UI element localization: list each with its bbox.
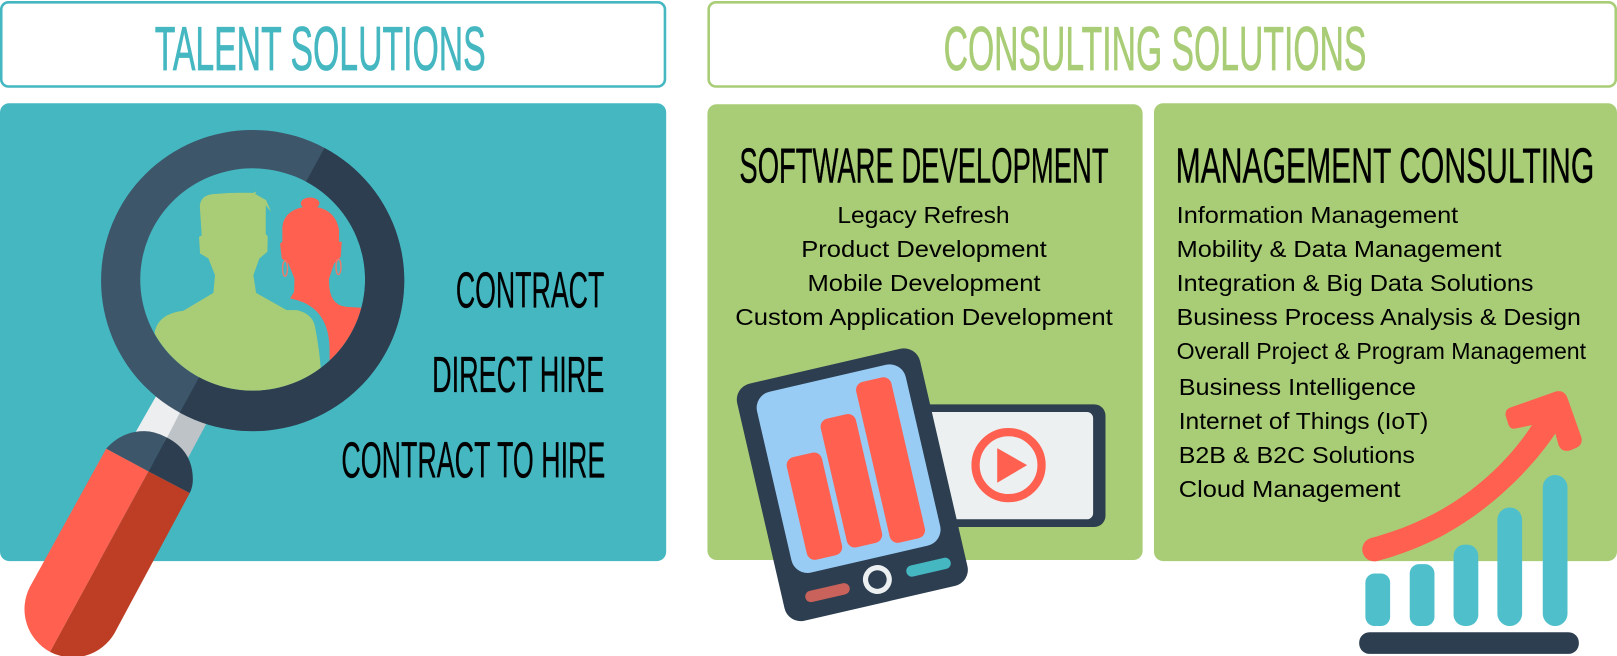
heading box: consulting solutions — [709, 2, 1616, 86]
list: management consulting services: Information Management — [1177, 202, 1459, 228]
people silhouettes — [154, 192, 362, 391]
icon: video screen — [877, 404, 1106, 527]
list: management consulting services: B2B & B2C Solutions — [1179, 442, 1415, 468]
icon: tablet with bar chart — [734, 345, 971, 624]
panel: talent solutions — [0, 103, 666, 561]
panel: software development — [707, 104, 1143, 560]
text: employment types: CONTRACT — [456, 261, 604, 318]
text: employment types: CONTRACT TO HIRE — [341, 432, 605, 489]
list: software development services: Product Development — [801, 236, 1047, 262]
icon: magnifying glass with people — [24, 130, 404, 656]
chart base — [1359, 632, 1579, 654]
list: management consulting services: Business Process Analysis & Design — [1177, 304, 1581, 330]
list: software development services: Custom Application Development — [735, 304, 1113, 330]
heading box: talent solutions — [1, 2, 665, 86]
list: management consulting services: Business Intelligence — [1179, 374, 1416, 400]
text: employment types — [341, 261, 605, 489]
woman silhouette — [280, 198, 362, 360]
icon: growth bar chart with arrow — [1359, 391, 1582, 654]
text: employment types: DIRECT HIRE — [432, 346, 604, 403]
list: management consulting services: Integration & Big Data Solutions — [1177, 270, 1533, 296]
list: management consulting services: Mobility & Data Management — [1177, 236, 1502, 262]
list: software development services — [735, 202, 1113, 330]
list: software development services: Mobile Development — [807, 270, 1041, 296]
list: management consulting services: Internet of Things (IoT) — [1179, 408, 1428, 434]
chart bars — [1365, 475, 1568, 626]
list: software development services: Legacy Refresh — [837, 202, 1010, 228]
magnifier handle — [24, 431, 193, 656]
list: management consulting services: Overall Project & Program Management — [1177, 338, 1587, 364]
list: management consulting services — [1177, 202, 1587, 502]
panel: management consulting — [1154, 103, 1617, 561]
magnifier neck — [132, 395, 206, 466]
list: management consulting services: Cloud Management — [1179, 476, 1401, 502]
man silhouette — [154, 192, 321, 391]
magnifier ring — [101, 130, 404, 431]
growth arrow — [1362, 391, 1582, 561]
heading box: talent solutions: TALENT SOLUTIONS — [155, 15, 486, 84]
play button — [976, 432, 1042, 498]
heading: software development: SOFTWARE DEVELOPMENT — [739, 139, 1109, 194]
